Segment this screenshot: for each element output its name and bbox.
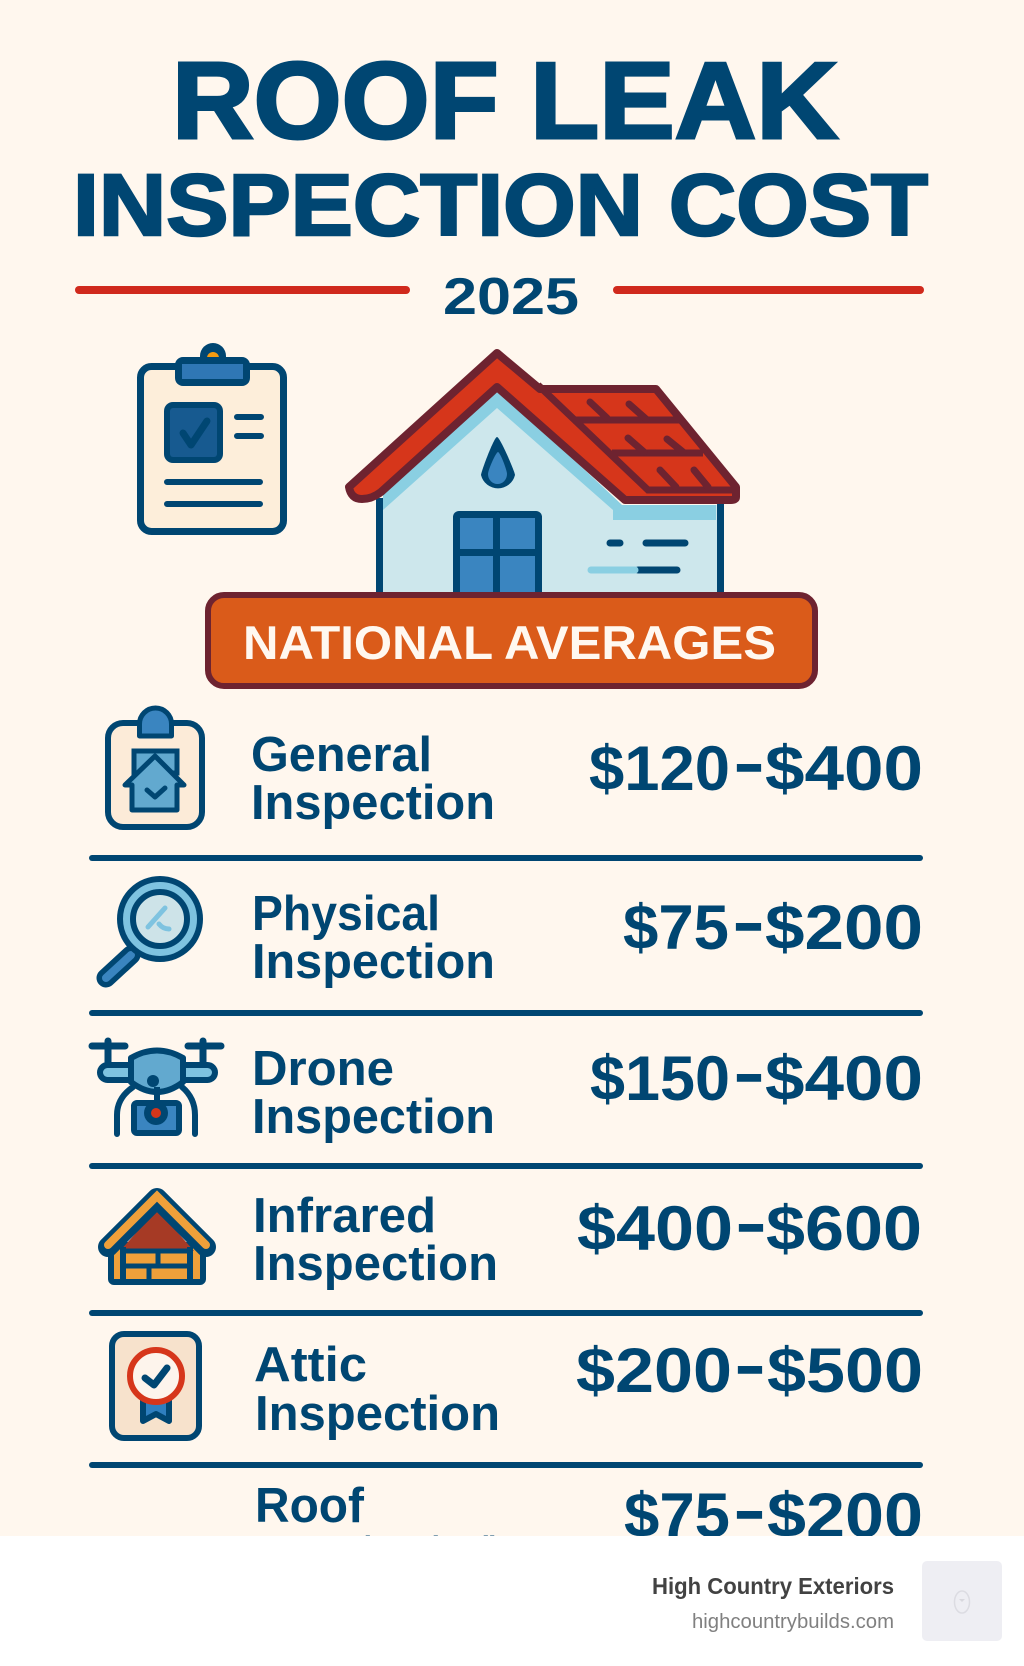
icon: infrared house — [108, 1196, 206, 1284]
title: ROOF LEAK — [172, 40, 838, 162]
icon: clipboard with checkbox — [140, 343, 284, 532]
price: – — [736, 729, 762, 799]
icon: house with leak drop — [349, 353, 736, 592]
icon: water drop — [481, 437, 515, 488]
banner: national averages — [208, 595, 815, 686]
row: drone inspection: Drone — [252, 1042, 394, 1096]
title: INSPECTION COST — [73, 157, 928, 254]
row: infrared inspection: Inspection — [253, 1237, 498, 1291]
price: $400 — [765, 734, 923, 804]
icon: logo placeholder — [922, 1561, 1002, 1641]
row: general inspection: General — [251, 728, 432, 782]
price: $75 — [623, 893, 729, 963]
price: – — [735, 888, 762, 958]
banner: national averages: NATIONAL AVERAGES — [243, 616, 776, 669]
price — [623, 888, 923, 963]
price: $75 — [624, 1481, 730, 1551]
roof — [349, 353, 736, 500]
icon: ribbon badge — [112, 1334, 199, 1438]
row: roof report — [255, 1476, 923, 1582]
price: – — [736, 1476, 763, 1546]
row: attic inspection: Inspection — [255, 1387, 500, 1441]
window — [453, 511, 542, 592]
row: attic inspection: Attic — [254, 1338, 367, 1392]
price: – — [738, 1189, 764, 1259]
price: $500 — [767, 1336, 923, 1406]
price: $200 — [576, 1336, 732, 1406]
row: roof report: Report (Itemized) — [255, 1528, 500, 1582]
icon: drone — [92, 1041, 221, 1134]
row: physical inspection — [106, 879, 923, 989]
price: $200 — [767, 1481, 923, 1551]
row: drone inspection: Inspection — [252, 1090, 495, 1144]
icon: clipboard with house — [108, 708, 202, 827]
price: $120 — [589, 734, 730, 804]
price — [590, 1039, 923, 1114]
footer bar: High Country Exteriors — [652, 1573, 894, 1599]
row: infrared inspection: Infrared — [253, 1189, 436, 1243]
price: $400 — [765, 1044, 923, 1114]
year with red rules: 2025 — [443, 268, 579, 326]
title — [73, 40, 928, 254]
price — [624, 1476, 923, 1551]
row: general inspection — [108, 708, 923, 830]
price: $200 — [765, 893, 923, 963]
price: $150 — [590, 1044, 730, 1114]
price — [577, 1189, 922, 1264]
price: – — [736, 1039, 762, 1109]
price: $400 — [577, 1194, 733, 1264]
row: attic inspection — [112, 1331, 923, 1441]
price: – — [737, 1331, 763, 1401]
price — [576, 1331, 923, 1406]
icon: magnifying glass — [106, 879, 200, 978]
row: general inspection: Inspection — [251, 776, 495, 830]
row: physical inspection: Inspection — [252, 935, 495, 989]
row: infrared inspection — [108, 1189, 922, 1291]
row: roof report: Roof — [255, 1479, 365, 1533]
row: physical inspection: Physical — [252, 887, 440, 941]
price — [589, 729, 923, 804]
year with red rules — [75, 268, 924, 326]
price: $600 — [766, 1194, 922, 1264]
footer bar: highcountrybuilds.com — [692, 1611, 894, 1633]
footer bar — [0, 1536, 1024, 1666]
row: drone inspection — [92, 1039, 923, 1144]
